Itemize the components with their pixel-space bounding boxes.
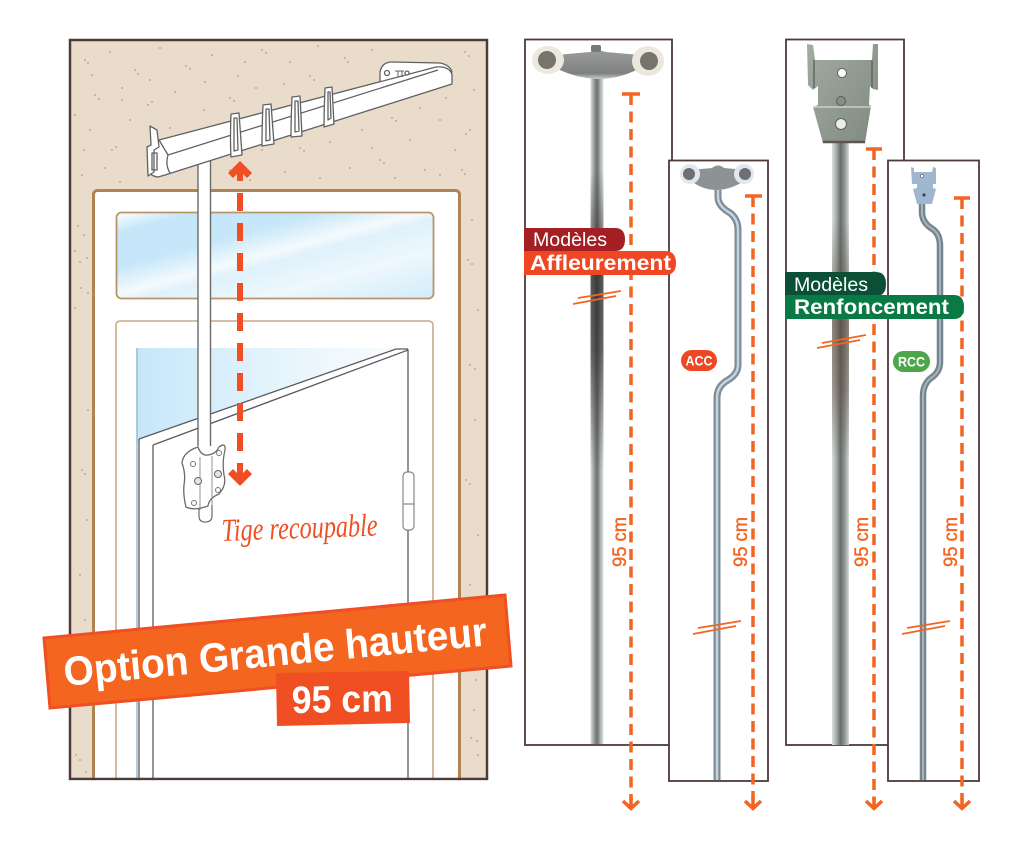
banner: 95 cm: 95 cm — [291, 678, 393, 722]
bent rod ACC — [717, 190, 738, 780]
label: ACC — [681, 350, 717, 371]
panel: Renfoncement large photo — [786, 40, 904, 745]
icon: hinge — [403, 472, 414, 530]
break mark A — [573, 291, 621, 304]
door glass — [137, 348, 396, 442]
metal bracket C — [807, 44, 878, 143]
label: Modèles Renfoncement — [785, 272, 964, 319]
arrow: dashed dimension line RCC — [954, 198, 970, 808]
bent rod RCC — [922, 203, 940, 780]
break mark RCC — [902, 621, 950, 634]
label: Modèles Affleurement: Affleurement — [530, 252, 671, 275]
panel: RCC photo — [888, 160, 979, 781]
panel: Affleurement large photo — [525, 40, 672, 745]
label: RCC — [893, 351, 930, 372]
illustration: rod and window bracket — [182, 160, 225, 522]
arrow: dashed dimension line C — [866, 149, 882, 808]
text: 95 cm A: 95 cm — [610, 517, 631, 567]
arrow: dashed dimension line A — [622, 94, 640, 808]
label: Modèles Affleurement: Modèles — [533, 230, 607, 251]
label: Modèles Renfoncement: Modèles — [794, 275, 868, 296]
rod C — [832, 143, 849, 745]
text: 95 cm C: 95 cm — [852, 517, 873, 567]
label: RCC: RCC — [898, 354, 925, 370]
break mark ACC — [693, 621, 741, 634]
text: 95 cm RCC: 95 cm — [941, 517, 962, 567]
panel: ACC photo — [669, 160, 768, 781]
door frame outer — [94, 190, 460, 790]
arrow: dashed dimension line ACC — [745, 196, 762, 808]
banner: 95 cm — [276, 671, 410, 726]
text: 95 cm ACC: 95 cm — [731, 517, 752, 567]
label: ACC: ACC — [686, 352, 712, 368]
door inner frame — [116, 321, 433, 791]
arrow: double-headed dashed height arrow — [228, 161, 252, 486]
transom window — [116, 212, 434, 298]
text: Tige recoupable: Tige recoupable — [221, 507, 378, 548]
roller head A — [532, 45, 664, 79]
illustration: rail with clips — [147, 62, 452, 177]
break mark C — [817, 335, 866, 348]
label: Modèles Renfoncement: Renfoncement — [794, 296, 949, 319]
rod A — [590, 78, 604, 744]
roller head ACC — [680, 164, 754, 190]
bracket RCC — [911, 167, 936, 204]
banner: Option Grande hauteur: Option Grande hauteur — [61, 608, 489, 695]
panel: wall and door illustration — [70, 40, 487, 791]
label: Modèles Affleurement — [524, 228, 676, 275]
